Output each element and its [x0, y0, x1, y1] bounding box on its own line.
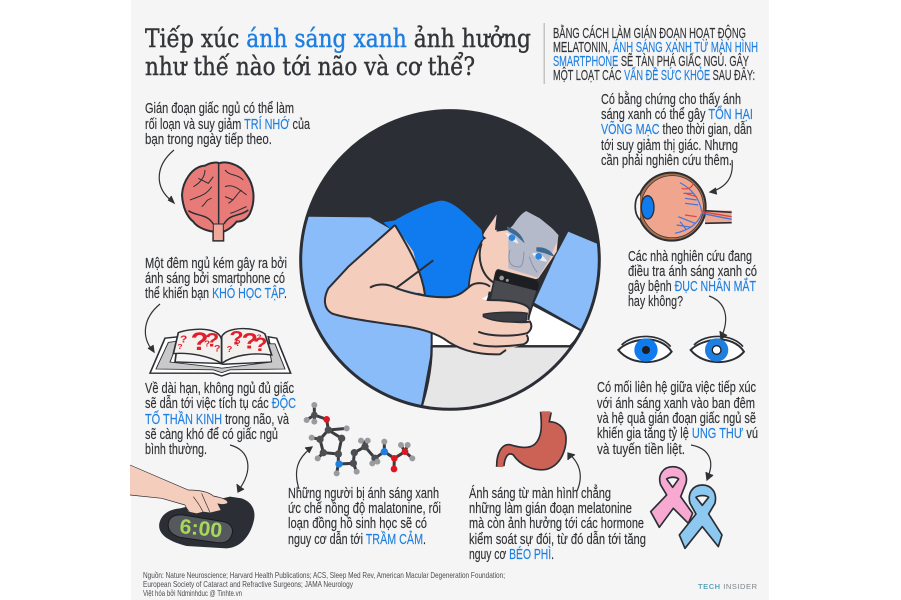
- arm and hand: [325, 225, 532, 354]
- text: obesity: kiểm soát sự đói, từ đó dẫn tới tăng: [469, 531, 646, 548]
- text: learning: ánh sáng bởi smartphone có: [145, 270, 285, 287]
- intro text: [553, 24, 758, 84]
- text: depression: ức chế nồng độ malatonine, rối: [288, 500, 441, 517]
- arrow to molecule: [296, 447, 312, 489]
- question marks: ?: [235, 338, 241, 348]
- text: memory: [145, 100, 310, 148]
- text: retina: Có bằng chứng cho thấy ánh: [601, 91, 741, 108]
- text: retina: [601, 91, 753, 169]
- blue ribbon: [679, 485, 722, 548]
- text: retina: cần phải nghiên cứu thêm.: [601, 152, 732, 169]
- question marks: ?: [177, 343, 183, 351]
- question marks: ?: [253, 334, 268, 355]
- text: obesity: mà còn ảnh hưởng tới các hormone: [469, 515, 644, 532]
- arrow to brain: [159, 150, 174, 203]
- left eye: [618, 336, 672, 362]
- left pillow: [300, 217, 433, 412]
- text: cataract: điều tra ánh sáng xanh có: [628, 263, 757, 280]
- icon: molecule: [304, 402, 415, 476]
- neck and face: [470, 225, 558, 292]
- text: neurotoxins: sẽ càng khó để có giấc ngủ: [145, 426, 278, 443]
- intro text: MELATONIN, ÁNH SÁNG XANH TỪ MÀN HÌNH: [553, 39, 758, 56]
- clock time: 6:00: [178, 515, 223, 542]
- text: obesity: nguy cơ BÉO PHÌ.: [469, 546, 554, 563]
- icon: open book: [150, 327, 291, 376]
- intro text: SMARTPHONE SẼ TÀN PHÁ GIẤC NGỦ. GÂY: [553, 52, 749, 70]
- question marks: ?: [227, 345, 232, 354]
- background panel: [131, 0, 769, 600]
- question marks: ?: [257, 333, 262, 341]
- question marks: ?: [242, 329, 258, 354]
- text: cancer: với ánh sáng xanh vào ban đêm: [597, 395, 755, 412]
- icon: stomach: [497, 411, 566, 470]
- text: neurotoxins: TỐ THẦN KINH trong não, và: [145, 410, 289, 428]
- sources footer: Việt hóa bởi Ndminhduc @ Tinhte.vn: [143, 588, 242, 598]
- logo: Tech Insider: TECH INSIDER: [698, 582, 758, 591]
- text: depression: Những người bị ánh sáng xanh: [288, 485, 439, 502]
- shirt: [383, 201, 483, 297]
- circle outline: [301, 111, 599, 409]
- text: neurotoxins: [145, 380, 296, 458]
- text: memory: rối loạn và suy giảm TRÍ NHỚ của: [145, 116, 310, 133]
- text: retina: tới suy giảm thị giác. Nhưng: [601, 137, 738, 154]
- right eye: [691, 336, 744, 362]
- text: cancer: khiến gia tăng tỷ lệ UNG THƯ vú: [597, 425, 758, 442]
- icon: alarm clock with hand: [130, 465, 254, 548]
- divider: [544, 23, 545, 84]
- question marks: ?: [180, 334, 188, 345]
- text: obesity: [469, 484, 646, 563]
- sources footer: [143, 570, 505, 598]
- arrow to clock: [230, 445, 248, 492]
- text: memory: bạn trong ngày tiếp theo.: [145, 131, 272, 148]
- sources footer: European Society of Cataract and Refractive Surgeons; JAMA Neurology: [143, 579, 354, 589]
- intro text: MỘT LOẠT CÁC VẤN ĐỀ SỨC KHỎE SAU ĐÂY:: [553, 66, 755, 84]
- hair: [495, 211, 568, 255]
- text: memory: Gián đoạn giấc ngủ có thể làm: [145, 100, 294, 117]
- arrow to stomach: [568, 453, 580, 491]
- question marks: ?: [205, 329, 219, 351]
- text: cancer: và tuyến tiền liệt.: [597, 441, 685, 458]
- right pillow: [534, 232, 598, 329]
- intro text: BẰNG CÁCH LÀM GIÁN ĐOẠN HOẠT ĐỘNG: [553, 24, 746, 42]
- text: neurotoxins: Về dài hạn, không ngủ đủ giấc: [145, 380, 294, 397]
- facial features: [507, 227, 524, 242]
- arrow to eyes: [709, 296, 727, 339]
- blanket: [420, 345, 570, 408]
- text: neurotoxins: sẽ dẫn tới việc tích tụ các ĐỘC: [145, 395, 296, 412]
- question marks: ?: [214, 344, 221, 354]
- white sheet: [432, 303, 583, 346]
- ear: [483, 214, 497, 238]
- text: learning: Một đêm ngủ kém gây ra bởi: [145, 255, 287, 272]
- title: Tiếp xúc ánh sáng xanh ảnh hưởng: [145, 24, 531, 53]
- text: depression: nguy cơ dẫn tới TRẦM CẢM.: [288, 531, 426, 548]
- central illustration: person using phone in bed: [300, 110, 600, 412]
- icon: brain: [182, 163, 254, 241]
- text: depression: loạn đồng hồ sinh học sẽ có: [288, 515, 427, 532]
- text: cataract: Các nhà nghiên cứu đang: [628, 248, 752, 265]
- text: cataract: hay không?: [628, 293, 683, 310]
- text: cancer: và hệ quả gián đoạn giấc ngủ sẽ: [597, 410, 756, 427]
- text: obesity: những làm gián đoạn melatonine: [469, 500, 632, 517]
- question marks: ?: [229, 327, 244, 349]
- arrow to book: [145, 304, 160, 352]
- icon: eyeball anatomy: [635, 173, 732, 241]
- sources footer: Nguồn: Nature Neuroscience; Harvard Health Publications; ACS, Sleep Med Rev, American Macular Degeneration Foundation;: [143, 570, 505, 580]
- pillow lines: [533, 305, 583, 332]
- text: cancer: Có mối liên hệ giữa việc tiếp xúc: [597, 379, 756, 396]
- phone: [490, 269, 536, 318]
- text: cancer: [597, 379, 758, 458]
- text: retina: VÕNG MẠC theo thời gian, dẫn: [601, 121, 752, 138]
- text: obesity: Ánh sáng từ màn hình chẳng: [469, 484, 611, 502]
- text: learning: thể khiến bạn KHÓ HỌC TẬP.: [145, 285, 287, 302]
- light triangle: [418, 292, 424, 294]
- question marks: [177, 327, 268, 356]
- question marks: ?: [204, 339, 210, 348]
- arrow to eyeball: [710, 160, 732, 194]
- title: như thế nào tới não và cơ thể?: [145, 52, 475, 81]
- icon: pair of eyes: [618, 336, 744, 362]
- text: learning: [145, 255, 287, 302]
- title: [145, 24, 531, 81]
- text: cataract: gây bệnh ĐỤC NHÂN MẮT: [628, 277, 756, 295]
- icon: awareness ribbons: [651, 467, 722, 548]
- pink ribbon: [651, 467, 693, 527]
- lit face: [508, 211, 558, 278]
- question marks: ?: [191, 327, 209, 356]
- arrow to ribbons: [691, 445, 713, 480]
- text: retina: sáng xanh có thể gây TỔN HẠI: [601, 105, 753, 123]
- text: neurotoxins: bình thường.: [145, 441, 207, 458]
- text: depression: [288, 485, 441, 548]
- text: cataract: [628, 248, 757, 310]
